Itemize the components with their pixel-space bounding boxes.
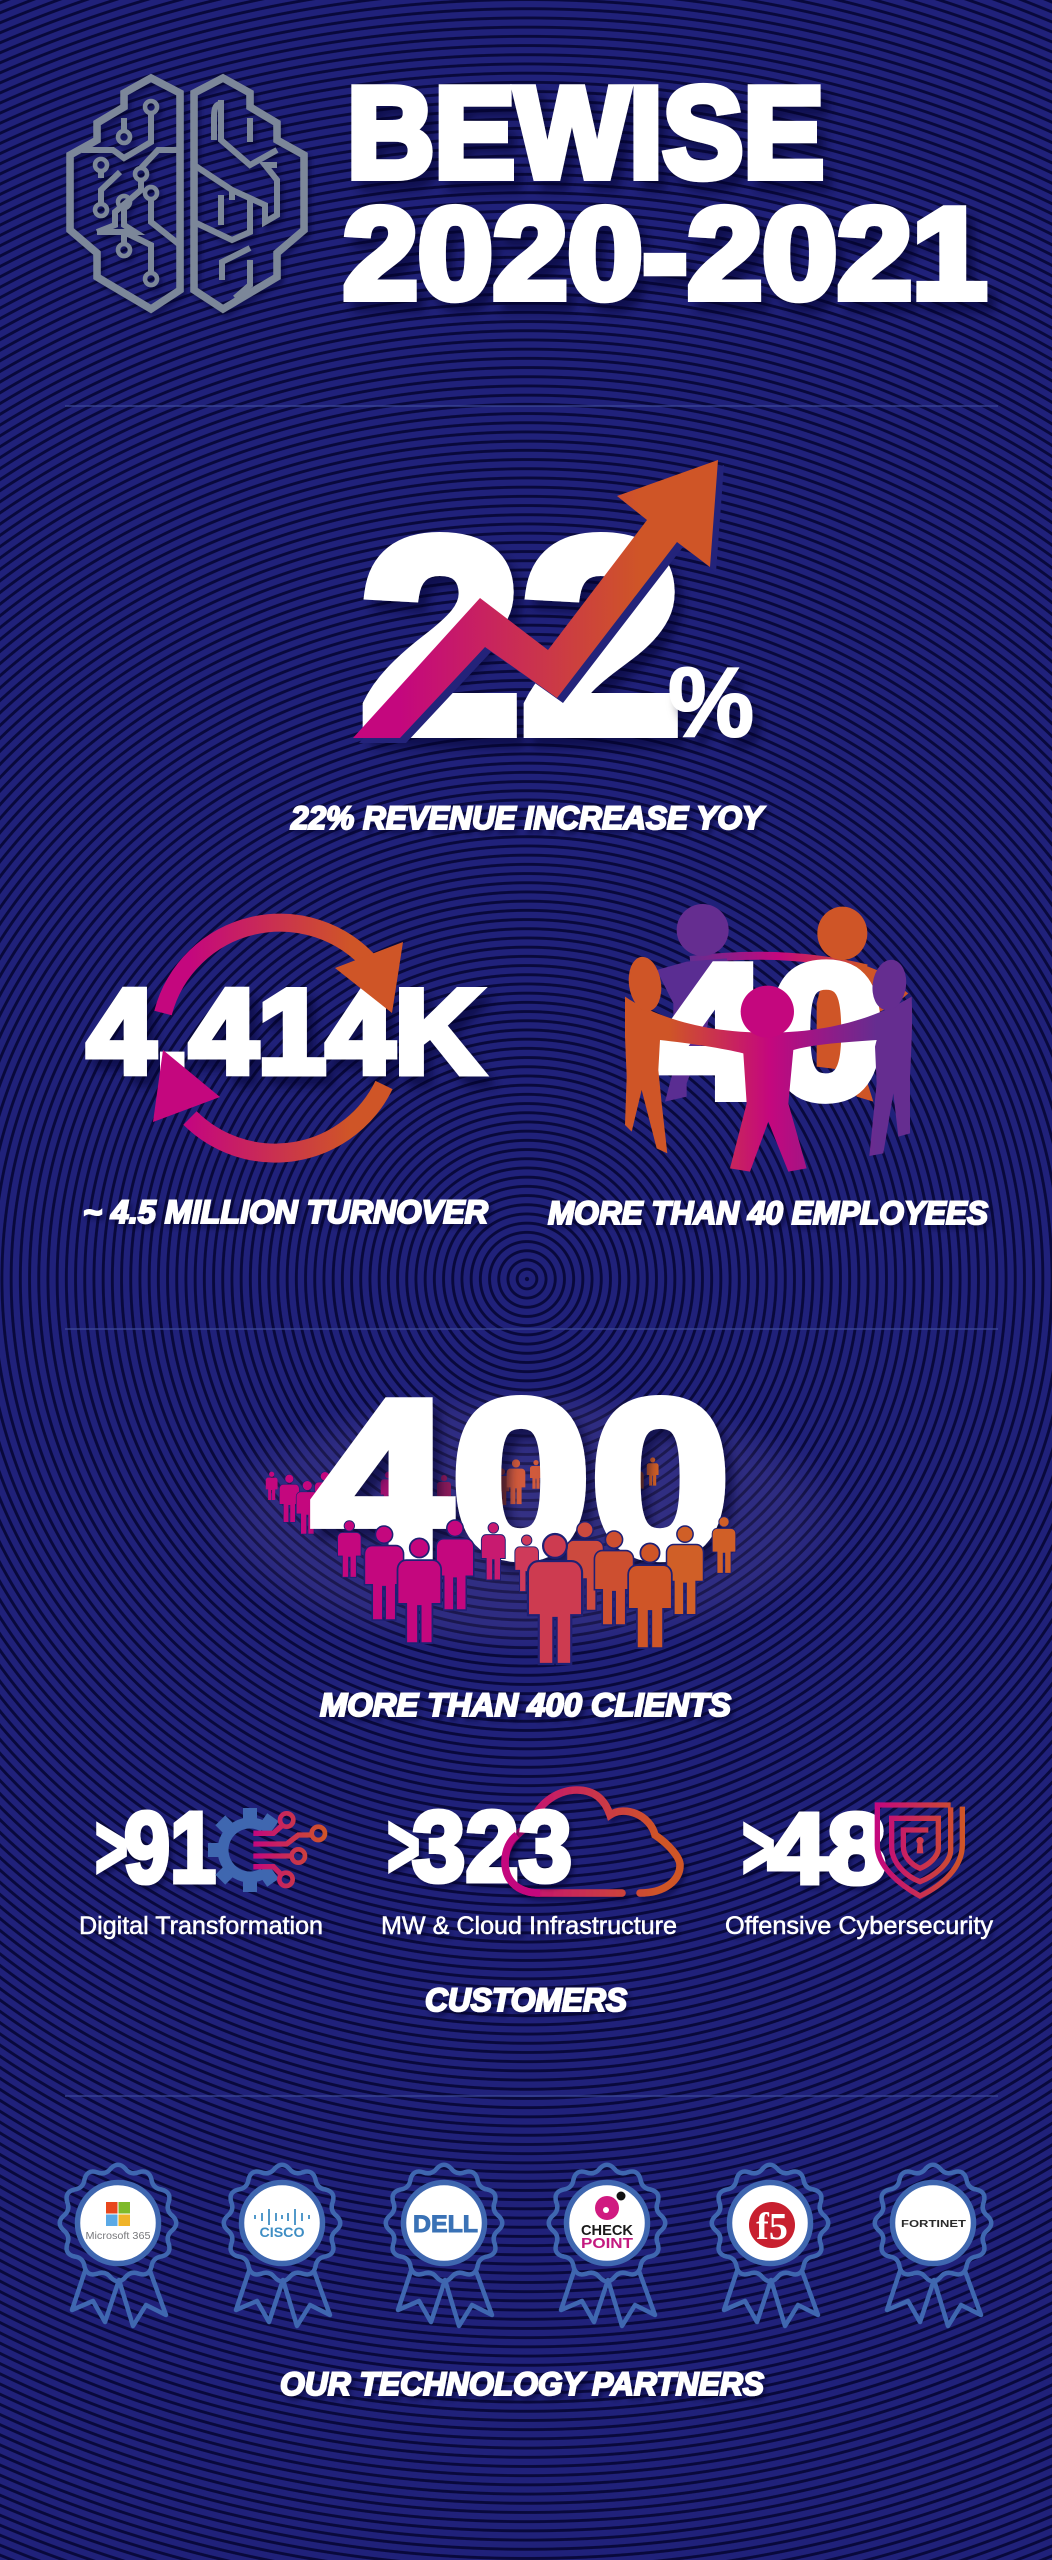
badge: Check Point: CHECK: [581, 2222, 633, 2239]
badge: F5: [698, 2151, 842, 2326]
caption: customers: CUSTOMERS: [425, 1982, 628, 2018]
icon: shield: [877, 1805, 962, 1896]
icon: rising arrow: [353, 460, 724, 743]
caption: revenue: 22% REVENUE INCREASE YOY: [290, 800, 766, 836]
number >91: 91: [124, 1792, 216, 1904]
label: Offensive Cybersecurity: [725, 1912, 994, 1940]
caption: clients: MORE THAN 400 CLIENTS: [320, 1687, 732, 1723]
badge: Check Point: POINT: [581, 2235, 633, 2252]
title block: [70, 61, 987, 326]
badge: Fortinet: [861, 2151, 1005, 2326]
number >323: >: [387, 1797, 420, 1897]
number >91: >: [95, 1798, 128, 1898]
icon: circular arrows: [153, 923, 403, 1153]
panel: turnover: [83, 923, 488, 1230]
badge: F5: f5: [756, 2206, 788, 2248]
badge: Dell: DELL: [413, 2211, 478, 2238]
icon: people in a circle: [625, 955, 912, 1172]
badge: Fortinet: FORTINET: [901, 2219, 966, 2230]
big number 40: 40: [652, 926, 884, 1138]
stat: offensive cybersecurity: [725, 1793, 994, 1940]
big number 400: 400: [312, 1355, 730, 1603]
panel: employees: [548, 904, 989, 1231]
caption: employees: MORE THAN 40 EMPLOYEES: [548, 1195, 989, 1231]
crowd in front of number: [338, 1517, 736, 1664]
heading: BEWISE: BEWISE: [347, 61, 824, 205]
badge: Dell: [372, 2151, 516, 2326]
icon: circuit brain: [70, 78, 304, 309]
icon: gear with circuits: [208, 1808, 325, 1892]
badge: Cisco: [210, 2151, 354, 2326]
crowd behind number: [266, 1457, 659, 1534]
stat: digital transformation: [79, 1792, 325, 1940]
back figures: [657, 904, 908, 1102]
badge: Microsoft 365: Microsoft 365: [86, 2231, 151, 2242]
heading: 2020-2021: 2020-2021: [343, 182, 987, 326]
number >91: [95, 1792, 216, 1904]
percent sign: %: [668, 647, 754, 757]
panel: clients: [197, 1355, 857, 1723]
caption: turnover: ~ 4.5 MILLION TURNOVER: [83, 1194, 488, 1230]
badge: Microsoft 365: [46, 2151, 190, 2326]
panel: revenue increase: [290, 460, 766, 836]
cloud front arc: [505, 1835, 540, 1893]
number >48: >: [742, 1798, 775, 1898]
stat: cloud infrastructure: [381, 1790, 680, 1940]
label: MW & Cloud Infrastructure: [381, 1912, 677, 1940]
number >48: 48: [768, 1793, 886, 1905]
icon: cloud: [505, 1790, 680, 1893]
badge: Cisco: CISCO: [260, 2224, 305, 2240]
panel: technology partners: [46, 2151, 1005, 2402]
panel: customers: [79, 1790, 994, 2018]
label: Digital Transformation: [79, 1912, 323, 1940]
number >323: 323: [412, 1791, 572, 1903]
big number 22: 22: [360, 483, 682, 790]
big number 4.414K: 4.414K: [87, 965, 483, 1099]
caption: partners: OUR TECHNOLOGY PARTNERS: [280, 2366, 765, 2402]
badge: Check Point: [535, 2151, 679, 2326]
